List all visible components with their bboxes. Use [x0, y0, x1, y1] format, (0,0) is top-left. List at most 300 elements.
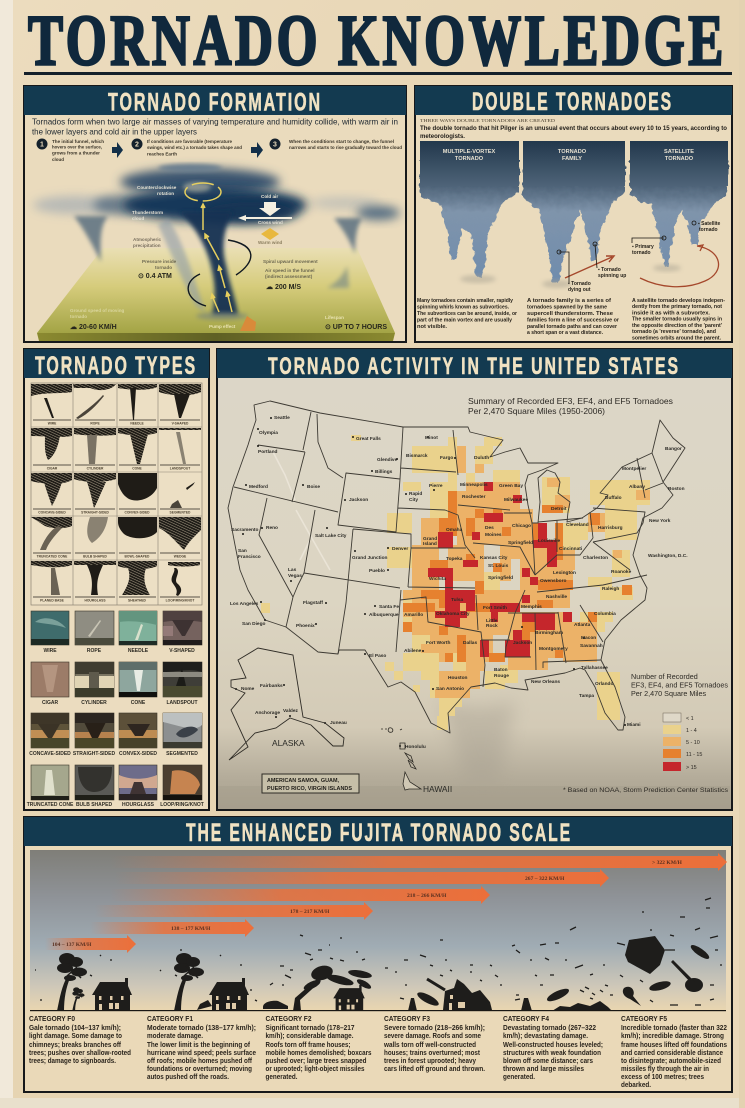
sketch labels [37, 422, 194, 602]
city labels: El Paso [369, 653, 386, 659]
city labels: Rock [486, 623, 498, 629]
illustration: satellite tornado: tornado [699, 227, 718, 233]
diagram labels: Spiral upward movement [263, 259, 318, 264]
city labels: Charleston [583, 555, 608, 561]
territories note box [262, 774, 359, 793]
formation steps: grows from a thunder [52, 150, 100, 156]
photo labels: CONE [131, 700, 146, 706]
Alaska outline [229, 648, 344, 760]
city labels: Boston [668, 486, 685, 492]
city labels: Pierre [429, 483, 443, 489]
city labels: Boise [307, 484, 320, 490]
city labels: Grand Junction [352, 555, 388, 561]
city labels: Springfield [488, 575, 513, 581]
category F0: trees; damage to signboards. [29, 1058, 116, 1065]
diagram labels: precipitation [133, 243, 161, 248]
intro text: THREE WAYS DOUBLE TORNADOES ARE CREATED [420, 118, 556, 123]
city labels: Jackson [513, 640, 532, 646]
explanatory text: tornado (a 'reverse' tornado), and [632, 329, 716, 335]
sketch labels: SHEATHED [128, 598, 147, 602]
sketch labels: LOOP/RING/KNOT [166, 598, 194, 602]
city labels: Juneau [330, 720, 347, 726]
formation steps: hovers over the surface, [52, 144, 102, 150]
city labels: Roanoke [611, 569, 632, 575]
speed bars: 218 – 266 KM/H [407, 893, 447, 899]
map summary text: Per 2,470 Square Miles (1950-2006) [468, 406, 605, 416]
map legend: EF3, EF4, and EF5 Tornadoes [631, 680, 728, 690]
illustration: satellite tornado: ▪ Primary [632, 244, 654, 250]
ground line [30, 1010, 726, 1011]
explanatory text: families form a line of successive or [527, 318, 619, 324]
category F3: walls torn off well-constructed [383, 1042, 476, 1049]
sketch labels: V-SHAPED [172, 422, 189, 426]
explanatory text: dently from the primary tornado, not [632, 304, 722, 310]
US outline and state borders [228, 401, 685, 733]
explanatory text: the opposite direction of the 'parent' [632, 323, 722, 329]
photo labels: STRAIGHT-SIDED [73, 751, 115, 757]
category F1: hurricane wind speed; peels surface [147, 1050, 256, 1057]
illustration: multiple-vortex tornado: TORNADO [455, 156, 484, 162]
map legend: Per 2,470 Square Miles [631, 689, 707, 698]
city labels: Atlanta [574, 622, 591, 628]
category F5: frame houses lifted off foundations [621, 1042, 727, 1049]
explanatory text: supercell thunderstorm. These [527, 311, 613, 317]
city labels: St. Louis [488, 563, 509, 569]
diagram labels: Cross wind [258, 220, 283, 225]
category F5: Incredible tornado (faster than 322 [621, 1025, 727, 1032]
city labels: Phoenix [296, 623, 315, 629]
photo labels: V-SHAPED [169, 648, 195, 654]
Alaska outline: ALASKA [272, 738, 305, 748]
category F2: Roofs torn off frame houses; [266, 1042, 350, 1049]
illustration: satellite tornado: ▪ Satellite [698, 221, 721, 227]
photo labels: HOURGLASS [122, 802, 155, 808]
ground block [37, 248, 395, 341]
category F2: Significant tornado (178–217 [266, 1025, 355, 1032]
category F5: excess of 100 metres; trees [621, 1074, 704, 1081]
map legend: < 1 [686, 716, 694, 722]
photo labels: CIGAR [42, 700, 58, 706]
category F3: Severe tornado (218–266 km/h); [384, 1025, 485, 1032]
category F0: chimneys; breaks branches off [29, 1042, 122, 1049]
sketch labels: NEEDLE [130, 422, 144, 426]
city labels: Chicago [512, 523, 531, 529]
city labels: Valdez [283, 708, 299, 714]
diagram labels: tornado [155, 265, 172, 270]
category F2: generated. [266, 1074, 298, 1081]
category F5: and carried considerable distance [621, 1050, 723, 1057]
sketch labels: CIGAR [47, 466, 58, 470]
heat map: tornado density cells [261, 435, 650, 730]
city labels: Moines [485, 532, 502, 538]
illustration: satellite tornado: TORNADO [665, 156, 694, 162]
photo labels: NEEDLE [128, 648, 149, 654]
city labels: Buffalo [605, 495, 622, 501]
city labels: Detroit [551, 506, 567, 512]
city labels: Albany [629, 484, 645, 490]
source note: * Based on NOAA, Storm Prediction Center Statistics [563, 787, 728, 794]
category F3: houses; trains overturned; most [384, 1050, 481, 1057]
category F1: The lower limit is the beginning of [147, 1042, 251, 1049]
city labels: Albuquerque [369, 612, 399, 618]
diagram labels: ☁ 200 M/S [266, 284, 301, 291]
panel: enhanced Fujita scale [24, 817, 732, 1092]
diagram labels: (indirect assessment) [265, 274, 313, 279]
city labels: Tampa [579, 693, 594, 699]
damage silhouettes [35, 898, 722, 1011]
city labels: Montpelier [622, 466, 646, 472]
intro text [32, 116, 398, 136]
diagram labels: Lifespan [325, 315, 344, 320]
map legend: 5 - 10 [686, 740, 700, 746]
diagram labels: Counterclockwise [137, 185, 177, 190]
sketch labels: WEDGE [174, 554, 187, 558]
city labels: Tulsa [451, 597, 464, 603]
illustration: satellite tornado [630, 141, 728, 287]
formation steps: swings, wind etc.) a tornado takes shape and [147, 145, 242, 150]
category F2: mobile homes demolished; boxcars [266, 1050, 372, 1057]
city labels: Cleveland [566, 522, 589, 528]
city labels: Great Falls [356, 436, 381, 442]
diagram labels [70, 185, 387, 331]
category F4: Devastating tornado (267–322 [503, 1025, 596, 1032]
illustration: satellite tornado: tornado [632, 250, 651, 256]
category F0: light damage. Some damage to [29, 1033, 122, 1040]
city labels: Salt Lake City [315, 533, 347, 539]
category F3: cars lifted off ground and thrown. [384, 1066, 485, 1073]
city labels: Rochester [462, 494, 486, 500]
photo labels: LOOP/RING/KNOT [160, 802, 204, 808]
city labels: Lexington [553, 570, 576, 576]
city labels: Reno [266, 525, 278, 531]
city labels: Denver [392, 546, 408, 552]
intro text: meteorologists. [420, 133, 465, 140]
F0 tree and house [57, 953, 132, 1011]
sketch labels: CONE [132, 466, 143, 470]
sketch labels: WIRE [48, 422, 57, 426]
territories note box: PUERTO RICO, VIRGIN ISLANDS [267, 786, 352, 792]
city labels: Los Angeles [230, 601, 259, 607]
category F5: CATEGORY F5 [621, 1014, 667, 1023]
explanatory text: The smaller tornado usually spins in [632, 316, 722, 322]
city labels: Savannah [580, 643, 603, 649]
explanatory text: A satellite tornado develops indepen- [632, 298, 725, 304]
sketch labels: TRUNCATED CONE [37, 554, 68, 558]
city labels: San Antonio [436, 686, 464, 692]
diagram labels: Ground speed of moving [70, 308, 125, 313]
diagram labels: Air speed in the funnel [265, 268, 315, 273]
city labels: Portland [258, 449, 278, 455]
map legend: 1 - 4 [686, 728, 697, 734]
city labels: Seattle [274, 415, 290, 421]
sketch labels: BOWL-SHAPED [125, 554, 150, 558]
city labels: Medford [249, 484, 268, 490]
icon: debris pile [240, 316, 256, 331]
category F1 [147, 1014, 256, 1081]
category F5: debarked. [621, 1082, 651, 1089]
city markers [235, 417, 626, 747]
explanatory text: A tornado family is a series of [527, 298, 611, 304]
sketch labels: PLANED BASE [40, 598, 65, 602]
city labels: Cincinnati [559, 546, 582, 552]
city labels: Fairbanks [260, 683, 283, 689]
city labels: Fort Smith [483, 605, 507, 611]
sketch labels: CONVEX-SIDED [124, 510, 150, 514]
city labels: Harrisburg [598, 525, 623, 531]
intro text: The double tornado that hit Pilger is an unusual event that occurs about every 10 to 15 years, according to [420, 125, 727, 132]
explanatory text: parallel tornado paths and can cover [527, 324, 617, 330]
category F4: structures with weak foundation [503, 1050, 601, 1057]
diagram labels: tornado [70, 314, 87, 319]
explanatory text: part of the main vortex and are usually [417, 318, 512, 324]
formation steps: If conditions are favorable (temperature [147, 139, 233, 144]
category F5: km/h); incredible damage. Strong [621, 1033, 724, 1040]
illustration: tornado family [523, 141, 626, 293]
illustration: tornado family: FAMILY [562, 156, 582, 162]
city labels: Green Bay [499, 483, 523, 489]
city labels: Orlando [595, 681, 613, 687]
city labels: Vegas [288, 573, 302, 579]
formation steps: narrows and starts to rise gradually toward the cloud [289, 145, 402, 150]
illustration: tornado family: spinning up [598, 273, 626, 279]
city labels: Owensboro [540, 578, 566, 584]
city labels: Nome [241, 686, 255, 692]
photo labels: LANDSPOUT [166, 700, 198, 706]
photo labels: CONVEX-SIDED [119, 751, 157, 757]
city labels: City [409, 497, 418, 503]
photo details [31, 611, 202, 800]
intro text [420, 118, 727, 140]
explanatory text: inside it as with a subvortex. [632, 310, 711, 316]
city labels: Amarillo [404, 612, 423, 618]
main tornado [158, 212, 248, 320]
explanatory text [417, 298, 725, 342]
sketch labels: HOURGLASS [84, 598, 106, 602]
illustration: tornado family: ▪ Tornado [598, 267, 621, 273]
sketch labels: BULB SHAPED [83, 554, 108, 558]
city labels: Jackson [349, 497, 368, 503]
city labels: New York [649, 518, 671, 524]
category F1: off roofs; mobile homes pushed off [147, 1058, 253, 1065]
category F4: generated. [503, 1074, 535, 1081]
map legend: Number of Recorded [631, 672, 698, 681]
diagram labels: Cold air [261, 194, 278, 199]
city labels: Houston [448, 675, 468, 681]
formation steps [36, 138, 402, 162]
diagram labels: cloud [132, 216, 144, 221]
category F1: CATEGORY F1 [147, 1014, 193, 1023]
city labels: Tallahassee [581, 665, 608, 671]
speed bars: 178 – 217 KM/H [290, 909, 330, 915]
category F5 [621, 1014, 727, 1089]
city labels: Billings [375, 469, 393, 475]
city labels: Milwaukee [504, 497, 528, 503]
F5 flying house and debris [623, 936, 711, 1006]
sketch labels: SEGMENTED [170, 510, 191, 514]
city labels: Columbia [594, 611, 616, 617]
diagram labels: Pressure inside [142, 259, 177, 264]
photo labels: CYLINDER [81, 700, 107, 706]
formation steps: 3 [273, 142, 277, 148]
sketch labels: STRAIGHT-SIDED [81, 510, 110, 514]
city labels: Abilene [404, 648, 422, 654]
Hawaii outline: HAWAII [423, 784, 452, 794]
city labels: Rouge [494, 673, 509, 679]
city labels: Santa Fe [379, 604, 399, 610]
city labels: Duluth [474, 455, 489, 461]
category F4: CATEGORY F4 [503, 1014, 549, 1023]
city labels: Nashville [546, 594, 567, 600]
side tornadoes [74, 216, 362, 288]
category F1: moderate damage. [147, 1033, 203, 1040]
category F3 [383, 1014, 485, 1073]
city labels: Minneapolis [460, 482, 488, 488]
city labels: Sacramento [231, 527, 259, 533]
F3 wrecked house [408, 979, 492, 1011]
city labels: Grand [423, 536, 437, 542]
heading: tornado formation: TORNADO FORMATION [108, 88, 322, 116]
F1 tree and house [174, 953, 249, 1011]
category F0 [29, 1014, 131, 1065]
map summary text: Summary of Recorded EF3, EF4, and EF5 Tornadoes [468, 396, 673, 406]
map legend: > 15 [686, 765, 697, 771]
city labels: Minot [425, 435, 438, 441]
photo grid of tornado types [31, 611, 202, 800]
photo labels [27, 648, 204, 808]
city labels [230, 415, 688, 750]
explanatory text: tornadoes spawned by the same [527, 304, 607, 310]
diagram labels: Pump effect [209, 324, 236, 329]
category F1: Moderate tornado (138–177 km/h); [147, 1025, 256, 1032]
category F3: CATEGORY F3 [384, 1014, 430, 1023]
city labels: Bangor [665, 446, 682, 452]
city labels: Island [423, 541, 437, 547]
city labels: Kansas City [480, 555, 508, 561]
sketch labels: ROPE [90, 422, 100, 426]
category F2: km/h); considerable damage. [266, 1033, 354, 1040]
explanatory text: not visible. [417, 324, 448, 330]
panel: tornado formation [24, 86, 406, 342]
city labels: Olympia [259, 430, 278, 436]
city labels: Honolulu [405, 744, 426, 750]
category F4: thrown and large missiles [503, 1066, 584, 1073]
sky backdrop [30, 850, 726, 1011]
category F5: missiles fly through the air in [621, 1066, 709, 1073]
city labels: Fort Worth [426, 640, 450, 646]
city labels: Topeka [446, 556, 463, 562]
photo labels: WIRE [43, 648, 57, 654]
intro text: the lower layers and cold air in the upper layers [32, 126, 197, 136]
category F0: CATEGORY F0 [29, 1014, 75, 1023]
city labels: Oklahoma City [436, 611, 470, 617]
city labels: Flagstaff [303, 600, 323, 606]
city labels: Montgomery [539, 646, 568, 652]
city labels: Birmingham [535, 630, 563, 636]
city labels: Fargo [440, 455, 453, 461]
city labels: Raleigh [602, 586, 619, 592]
category F5: to disintegrate; automobile-sized [621, 1058, 721, 1065]
city labels: Washington, D.C. [648, 553, 688, 559]
explanatory text: a short span or a vast distance. [527, 330, 604, 336]
illustration: multiple-vortex tornado [420, 141, 519, 283]
sketch grid of tornado types [27, 383, 204, 808]
category F1: foundations or overturned; moving [147, 1066, 252, 1073]
city labels: New Orleans [531, 679, 560, 685]
speed bars: 138 – 177 KM/H [171, 926, 211, 932]
category F2 [266, 1014, 372, 1081]
territories note box: AMERICAN SAMOA, GUAM, [267, 778, 340, 784]
city labels: San [238, 548, 247, 554]
city labels: Glendive [377, 457, 398, 463]
speed bars: 104 – 137 KM/H [52, 942, 92, 948]
map summary text [468, 396, 673, 416]
diagram labels: Warm wind [258, 240, 283, 245]
city labels: Pueblo [369, 568, 385, 574]
category F4: Well-constructed houses leveled; [503, 1042, 603, 1049]
Hawaii outline [381, 728, 452, 794]
formation steps: 1 [40, 142, 44, 148]
category F3: severe damage. Roofs and some [384, 1033, 481, 1040]
diagram labels: rotation [157, 191, 174, 196]
city labels: Macon [581, 635, 596, 641]
explanatory text: Many tornadoes contain smaller, rapidly [417, 298, 513, 304]
diagram labels: ⊙ 0.4 ATM [138, 273, 172, 280]
speed bars [45, 853, 727, 953]
sketch labels: CONCAVE-SIDED [38, 510, 66, 514]
photo labels: BULB SHAPED [76, 802, 112, 808]
flying debris [35, 898, 722, 1005]
F2 tree, car and house [263, 963, 372, 1011]
heading: tornado types: TORNADO TYPES [35, 352, 197, 380]
category F2: or uprooted; light-object missiles [266, 1066, 365, 1073]
sketch labels: CYLINDER [87, 466, 104, 470]
F4 stump and debris [521, 986, 612, 1011]
category F4: km/h); devastating damage. [503, 1033, 588, 1040]
formation steps: The initial funnel, which [52, 139, 104, 144]
city labels: Rapid [409, 491, 422, 497]
city labels: Francisco [238, 554, 261, 560]
explanatory text: spinning whirls known as subvortices. [417, 304, 510, 310]
city labels: Bismarck [406, 453, 428, 459]
formation steps: When the conditions start to change, the funnel [289, 139, 394, 144]
diagram labels: ⊙ UP TO 7 HOURS [325, 324, 387, 331]
category F4: blown off some distance; cars [503, 1058, 593, 1065]
diagram labels: Thunderstorm [132, 210, 163, 215]
photo labels: ROPE [87, 648, 102, 654]
illustration: tornado family: ▪ Tornado [568, 281, 591, 287]
panel: tornado activity map [217, 349, 732, 810]
city labels: Omaha [446, 527, 463, 533]
formation steps: 2 [135, 142, 139, 148]
category F2: CATEGORY F2 [266, 1014, 312, 1023]
category F1: autos pushed off the roads. [147, 1074, 229, 1081]
diagram labels: Atmospheric [133, 237, 162, 242]
photo labels: SEGMENTED [166, 751, 198, 757]
category F0: trees; pushes over shallow-rooted [29, 1050, 131, 1057]
city labels: Springfield [508, 540, 533, 546]
city labels: Louisville [538, 538, 560, 544]
city labels: Dallas [463, 640, 477, 646]
sketch labels: LANDSPOUT [170, 466, 190, 470]
category F2: pushed over; large trees snapped [266, 1058, 366, 1065]
illustration: tornado family: dying out [568, 287, 591, 293]
photo labels: TRUNCATED CONE [27, 802, 74, 808]
formation steps: reaches Earth [147, 152, 177, 156]
photo labels: CONCAVE-SIDED [29, 751, 71, 757]
explanatory text: The subvortices can be around, inside, or [417, 311, 517, 317]
panel: double tornadoes [415, 86, 732, 342]
category F0: Gale tornado (104–137 km/h); [29, 1025, 121, 1032]
